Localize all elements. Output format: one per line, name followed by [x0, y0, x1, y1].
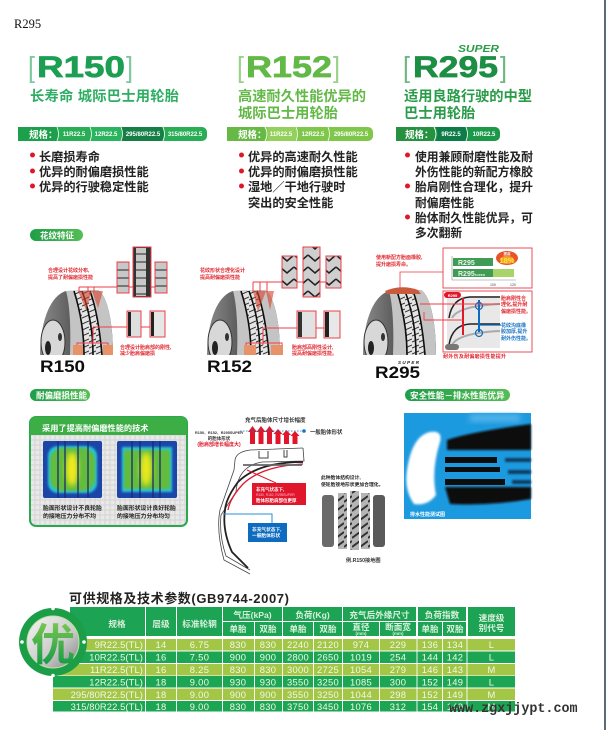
feature list R295: 胎体耐久性能优异，可 — [415, 211, 533, 225]
diagram: tire structure comparison: 胎肩刚性合 — [501, 295, 526, 302]
page frame strip — [604, 0, 606, 730]
table row bands — [53, 639, 515, 712]
feature list R295: 外伤性能的新配方橡胶 — [415, 165, 533, 179]
panel: uneven wear technology — [30, 417, 187, 526]
spec bar R150: 12R22.5 — [95, 132, 118, 138]
table row: 315/80R22.5: 830 — [230, 701, 246, 712]
table header: 单胎 — [229, 623, 247, 634]
table header: 双胎 — [446, 623, 464, 634]
table row: 9R22.5: 6.75 — [190, 639, 209, 650]
table row: 10R22.5: L — [489, 652, 494, 662]
table row: 315/80R22.5 — [71, 701, 496, 712]
table row: 12R22.5: 930 — [230, 676, 246, 688]
table row: 315/80R22.5: 1076 — [350, 701, 372, 712]
heading R150: ] — [126, 52, 133, 84]
tire cross section drawing — [219, 448, 304, 574]
callout text R150: 合理设计胎肩部的刚性, — [120, 344, 172, 351]
feature list R150: 长磨损寿命 — [39, 149, 100, 164]
table row: 315/80R22.5: 154 — [422, 701, 438, 712]
table header: 双胎 — [259, 623, 277, 634]
spec bar R295: 9R22.5 — [441, 132, 461, 138]
table row: 9R22.5: 14 — [155, 639, 167, 650]
bar chart: wear life comparison: R295SUPER — [458, 271, 486, 278]
diagram: tire structure comparison: 偏磨损性能。 — [501, 308, 531, 315]
feature list R295 — [405, 150, 533, 240]
label: carcass shape of R150 R152 R295SUPER: (胎肩部增长幅度大) — [197, 441, 241, 448]
heading R150: [ — [28, 52, 35, 84]
spec bar R150: 规格： — [29, 129, 58, 141]
table row: 9R22.5: 974 — [353, 639, 369, 650]
feature list R150: 优异的行驶稳定性能 — [39, 179, 149, 194]
table row: 12R22.5: 9.00 — [190, 676, 209, 688]
table header — [70, 607, 515, 636]
table row: 295/80R22.5: M — [487, 689, 496, 700]
table row: 315/80R22.5: 830 — [260, 701, 276, 712]
heat map captions — [43, 504, 176, 520]
tire diagram R152 — [200, 247, 341, 376]
table row: 12R22.5: 300 — [390, 676, 406, 688]
table row: 11R22.5: 279 — [390, 664, 406, 675]
spec bar R295 — [396, 127, 500, 141]
callout: 18 percent — [496, 251, 518, 265]
table row: 315/80R22.5: 149 — [447, 701, 463, 712]
table row: 10R22.5 — [89, 652, 494, 662]
table row: 11R22.5: M — [487, 664, 496, 675]
table row: 10R22.5: 7.50 — [190, 652, 209, 662]
bar chart: wear life comparison: R295 — [458, 260, 475, 267]
table row: 10R22.5: 900 — [230, 652, 246, 662]
table row: 12R22.5: 12R22.5(TL) — [89, 676, 143, 688]
callout text R295: 使用新配方胎面橡胶, — [376, 254, 423, 261]
table row: 11R22.5: 16 — [155, 664, 167, 675]
spec bar R152: 295/80R22.5 — [334, 132, 369, 138]
table header: 双胎 — [319, 623, 337, 634]
heading R295 SUPER: [ — [403, 52, 410, 84]
feature list R152: 优异的高速耐久性能 — [248, 149, 358, 164]
subtitle R152: 高速耐久性能优异的 — [238, 87, 366, 105]
table row: 11R22.5: 143 — [447, 664, 463, 675]
table row: 11R22.5: 3000 — [287, 664, 309, 675]
callout: blue box — [248, 523, 287, 542]
callout: red box: 非充气状态下, — [256, 486, 284, 493]
bar chart: wear life comparison: 100 — [490, 283, 496, 287]
heading R152: [ — [237, 52, 244, 84]
callout: red box: R150, R152, R295SUPER — [256, 493, 295, 497]
callout text R150: 合理设计花纹分布, — [48, 267, 90, 274]
table row: 10R22.5: 16 — [155, 652, 167, 662]
table row: 315/80R22.5: 18 — [155, 701, 167, 712]
diagram: tire structure comparison: 耐外伤性能。 — [501, 335, 531, 342]
callout: blue box: 一般胎体形状 — [252, 532, 280, 539]
bar chart: wear life comparison — [443, 248, 532, 288]
photo: water drainage test — [404, 413, 531, 519]
table row: 315/80R22.5: 3450 — [317, 701, 339, 712]
heading R295 SUPER: ] — [500, 52, 507, 84]
spec bar R152: 规格： — [238, 129, 267, 141]
tread inset images — [246, 247, 341, 345]
heading R152: ] — [333, 52, 340, 84]
table row: 12R22.5: 3550 — [287, 676, 309, 688]
spec bar R152: 11R22.5 — [270, 132, 293, 138]
model label R150: R150 — [40, 357, 85, 376]
callout: 18 percent: 18% — [499, 256, 515, 265]
table row: 295/80R22.5: 298 — [390, 689, 406, 700]
heat map captions: 的接地压力分布不均 — [43, 512, 96, 520]
callout text R295 — [376, 254, 423, 268]
callout text R295: 提升磨损寿命。 — [376, 261, 411, 268]
callout: 18 percent: 提高 — [504, 251, 511, 256]
table row: 12R22.5: L — [489, 676, 494, 688]
feature list R152: 湿地／干地行驶时 — [248, 179, 346, 194]
diagram: tire structure comparison: 理化,提升耐 — [501, 301, 527, 308]
spec bar R150: 295/80R22.5 — [126, 132, 161, 138]
callout text R150 — [48, 267, 172, 357]
subtitle R152: 城际巴士用轮胎 — [238, 104, 338, 122]
diagram: tire structure comparison: R295 — [448, 293, 458, 298]
subtitle R295: 适用良路行驶的中型 — [404, 87, 532, 105]
feature list R295: 胎肩刚性合理化，提升 — [415, 180, 533, 194]
section pill: tread features: 花纹特征 — [40, 230, 75, 240]
table header: 负荷(Kg) — [295, 609, 330, 620]
photo caption: 排水性能测试图 — [410, 511, 445, 518]
diagram: tire structure comparison: 胶加厚,提升 — [501, 328, 527, 335]
heat map captions: 胎面形状设计不良轮胎 — [43, 504, 102, 512]
caption: footprint example: 例.R150接地图 — [346, 556, 381, 564]
table header: 标准轮辋 — [182, 618, 217, 629]
table title: 可供规格及技术参数(GB9744-2007) — [69, 591, 290, 606]
table header: (mm) — [356, 631, 367, 636]
heat map: good footprint — [117, 441, 177, 498]
tire diagram R150 — [40, 247, 172, 376]
table row: 295/80R22.5: 1044 — [350, 689, 372, 700]
table row: 9R22.5: 229 — [390, 639, 406, 650]
subtitle R295 — [404, 87, 532, 122]
caption: footprint note: 使轮胎接地形状更加合理化。 — [321, 481, 383, 488]
label: carcass shape of R150 R152 R295SUPER — [195, 431, 243, 448]
feature list R150: 优异的耐偏磨损性能 — [39, 164, 149, 179]
table header: 速度级 — [479, 612, 505, 623]
caption: footprint note — [321, 474, 383, 488]
label: carcass shape of R150 R152 R295SUPER: R150、R152、R295SUPER — [195, 431, 243, 435]
heading R152 — [237, 51, 340, 84]
table row: 12R22.5: 930 — [260, 676, 276, 688]
spec bar R295: 规格： — [405, 129, 434, 141]
table row: 9R22.5: 830 — [230, 639, 246, 650]
table row: 11R22.5: 2725 — [317, 664, 339, 675]
heading R150: R150 — [37, 51, 125, 84]
callout text R152 — [200, 267, 337, 357]
icon: tire R295 — [363, 290, 436, 364]
table row: 315/80R22.5: 315/80R22.5(TL) — [71, 701, 143, 712]
callout text R152: 提高耐偏磨损性能。 — [292, 350, 337, 357]
label: general carcass shape: 一般胎体形状 — [310, 428, 343, 436]
feature list R152 — [239, 149, 358, 210]
caption under structure diagram: 耐外伤及耐偏磨损性能提升 — [443, 353, 506, 360]
callout text R152: 提高耐偏磨损性能 — [200, 274, 240, 281]
table header: 别代号 — [479, 622, 505, 633]
callout text R150: 减少胎肩偏磨损 — [120, 350, 155, 357]
label: carcass shape of R150 R152 R295SUPER: 的胎体形状 — [208, 435, 231, 442]
footprint image — [322, 491, 385, 550]
column: R295 summary — [396, 44, 533, 240]
icon: tire R150 — [40, 290, 113, 364]
table row: 315/80R22.5: 9.00 — [190, 701, 209, 712]
heading R150 — [28, 51, 133, 84]
column: R150 summary — [18, 51, 207, 194]
table row: 295/80R22.5: 149 — [447, 689, 463, 700]
spec bar R152: 12R22.5 — [302, 132, 325, 138]
table row: 9R22.5: 136 — [422, 639, 438, 650]
table header: 直径 — [352, 621, 370, 632]
subtitle R152 — [238, 87, 366, 122]
section pill: tread features — [30, 229, 83, 241]
table row: 10R22.5: 2800 — [287, 652, 309, 662]
diagram: carcass cross section — [195, 416, 385, 574]
table header: 单胎 — [289, 623, 307, 634]
diagram: tire structure comparison: 花纹沟底橡 — [501, 322, 526, 329]
spec bar R150 — [18, 127, 207, 141]
heat map: poor footprint — [43, 441, 102, 498]
icon: quality badge — [19, 607, 87, 677]
callout text R152: 胎肩部高刚性设计, — [292, 344, 334, 351]
table row: 11R22.5: 830 — [260, 664, 276, 675]
table row: 10R22.5: 2650 — [317, 652, 339, 662]
table header: 负荷指数 — [425, 609, 460, 620]
table row: 295/80R22.5: 3250 — [317, 689, 339, 700]
table row: 9R22.5: 2120 — [317, 639, 339, 650]
model label R152: R152 — [207, 357, 252, 376]
feature list R150 — [30, 149, 149, 194]
spec bar R152 — [227, 127, 373, 141]
table row: 295/80R22.5: 295/80R22.5(TL) — [71, 689, 143, 700]
model label R295 SUPER: SUPER — [398, 360, 420, 365]
feature list R152: 优异的耐偏磨损性能 — [248, 164, 358, 179]
table row: 10R22.5: 900 — [260, 652, 276, 662]
table row: 12R22.5: 1085 — [350, 676, 372, 688]
table header: 气压(kPa) — [233, 609, 272, 620]
spec bar R150: 11R22.5 — [63, 132, 86, 138]
table row: 11R22.5: 146 — [422, 664, 438, 675]
table row: 11R22.5: 830 — [230, 664, 246, 675]
feature list R295: 耐偏磨性能 — [415, 196, 474, 210]
table row: 295/80R22.5: 900 — [230, 689, 246, 700]
tire diagram R295 — [363, 248, 532, 382]
table row: 10R22.5: 144 — [422, 652, 438, 662]
table header: 规格 — [108, 618, 126, 629]
table header: 单胎 — [421, 623, 439, 634]
table row: 295/80R22.5: 900 — [260, 689, 276, 700]
table header: (mm) — [392, 631, 404, 636]
callout: red box — [252, 483, 306, 505]
callout: red box: 胎体形胎肩部位更厚 — [256, 497, 297, 504]
table header: 断面宽 — [385, 621, 411, 632]
section pill: safety: 安全性能－排水性能优异 — [410, 390, 505, 400]
table row: 315/80R22.5: 312 — [390, 701, 406, 712]
caption: footprint note: 此种胎体结构设计, — [321, 474, 361, 481]
section pill: uneven wear performance: 耐偏磨损性能 — [36, 390, 88, 400]
icon: quality badge: 优 — [31, 621, 75, 670]
table row: 11R22.5: 8.25 — [190, 664, 209, 675]
table row: 315/80R22.5: M — [487, 701, 496, 712]
table row: 9R22.5: 9R22.5(TL) — [95, 639, 143, 650]
table row: 10R22.5: 1019 — [350, 652, 372, 662]
table row: 9R22.5: 830 — [260, 639, 276, 650]
diagram: tire structure comparison — [420, 291, 532, 352]
icon: tire R152 — [207, 290, 280, 364]
table row: 295/80R22.5: 18 — [155, 689, 167, 700]
subtitle R150: 长寿命 城际巴士用轮胎 — [30, 87, 179, 105]
feature list R152: 突出的安全性能 — [248, 195, 333, 210]
feature list R295: 多次翻新 — [415, 226, 462, 240]
table header: 层级 — [152, 618, 170, 629]
spec bar R295: 10R22.5 — [473, 132, 496, 138]
table row: 10R22.5: 142 — [447, 652, 463, 662]
table row: 12R22.5 — [89, 676, 494, 688]
table row: 12R22.5: 152 — [422, 676, 438, 688]
feature list R295: 使用兼顾耐磨性能及耐 — [415, 150, 533, 164]
table row: 12R22.5: 149 — [447, 676, 463, 688]
heading R152: R152 — [246, 51, 332, 84]
table row: 9R22.5 — [95, 639, 494, 650]
bar chart: wear life comparison: 120 — [510, 283, 516, 287]
table row: 9R22.5: 134 — [447, 639, 463, 650]
table row: 295/80R22.5 — [71, 689, 496, 700]
column: R152 summary — [227, 51, 373, 210]
model label R295 SUPER: R295 — [375, 363, 420, 382]
spec table — [53, 607, 515, 712]
table row: 315/80R22.5: 3750 — [287, 701, 309, 712]
heading R295 SUPER — [403, 44, 507, 84]
diagram title: 充气后胎体尺寸增长幅度 — [245, 416, 306, 424]
red growth arrows — [248, 426, 300, 444]
tread inset images — [77, 247, 167, 345]
table row: 11R22.5: 11R22.5(TL) — [90, 664, 143, 675]
callout text R150: 提高了耐偏磨损性能 — [48, 274, 93, 281]
watermark: www.zgxjjypt.com — [449, 702, 578, 717]
subtitle R295: 巴士用轮胎 — [404, 104, 475, 122]
panel heading: 采用了提高耐偏磨性能的技术 — [42, 423, 149, 433]
heading R295 SUPER: SUPER — [458, 44, 500, 55]
table row: 11R22.5: 1054 — [350, 664, 372, 675]
spec bar R150: 315/80R22.5 — [168, 132, 203, 138]
table row: 11R22.5 — [90, 664, 496, 675]
table row: 9R22.5: L — [489, 639, 494, 650]
table row: 12R22.5: 18 — [155, 676, 167, 688]
table row: 295/80R22.5: 3550 — [287, 689, 309, 700]
callout text R152: 花纹形状合理化设计 — [200, 267, 245, 274]
heading R295 SUPER: R295 — [413, 51, 498, 84]
heat map captions: 胎面形状设计良好轮胎 — [117, 504, 176, 512]
heat map captions: 的接地压力分布均匀 — [117, 512, 170, 520]
table row: 295/80R22.5: 9.00 — [190, 689, 209, 700]
table row: 10R22.5: 254 — [390, 652, 406, 662]
table row: 9R22.5: 2240 — [287, 639, 309, 650]
table row: 295/80R22.5: 152 — [422, 689, 438, 700]
table row: 12R22.5: 3250 — [317, 676, 339, 688]
table row: 10R22.5: 10R22.5(TL) — [89, 652, 143, 662]
table header: 充气后外缘尺寸 — [349, 609, 410, 620]
page label R295: R295 — [14, 17, 41, 31]
callout: blue box: 非充气状态下, — [252, 526, 281, 533]
